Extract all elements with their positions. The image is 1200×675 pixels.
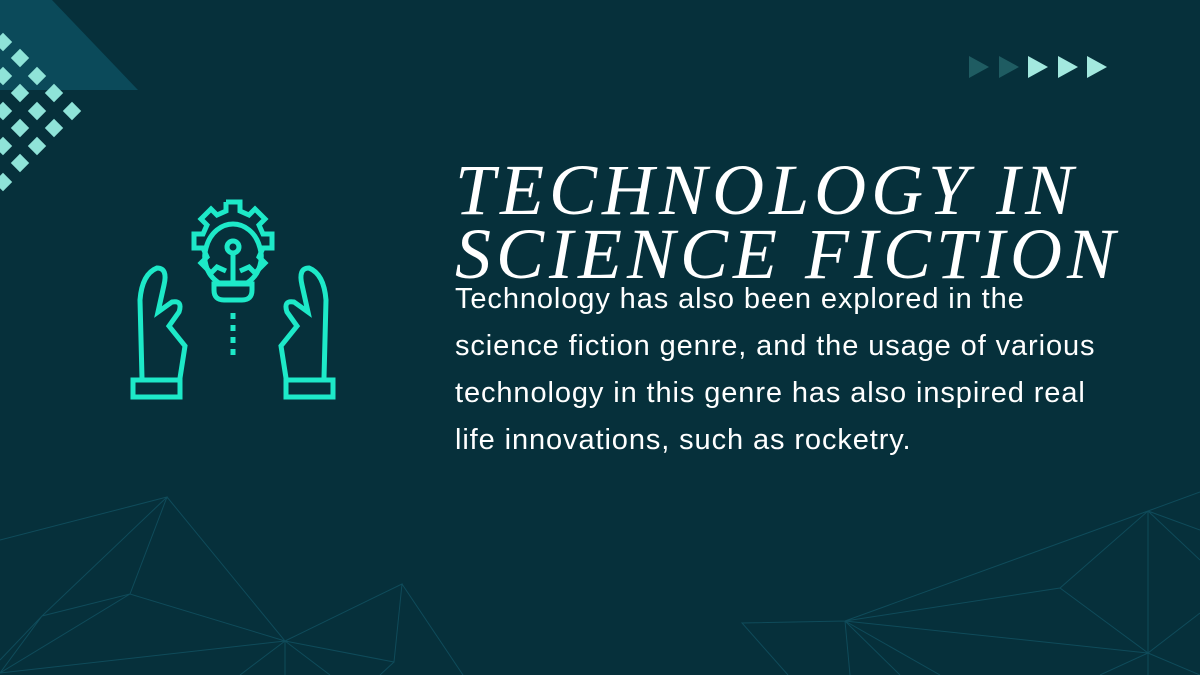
decorative diamond grid (0, 32, 82, 192)
body text: Technology has also been explored in the (455, 283, 1025, 315)
body text: science fiction genre, and the usage of various (455, 330, 1095, 362)
title: SCIENCE FICTION (455, 214, 1120, 294)
body text: technology in this genre has also inspired real (455, 377, 1086, 409)
title (455, 150, 1120, 294)
icon: hands holding idea gear bulb (130, 200, 336, 400)
body text (455, 283, 1095, 456)
title: TECHNOLOGY IN (455, 150, 1078, 230)
decorative corner triangle (0, 0, 138, 90)
body text: life innovations, such as rocketry. (455, 424, 912, 456)
decorative arrows (969, 56, 1107, 78)
